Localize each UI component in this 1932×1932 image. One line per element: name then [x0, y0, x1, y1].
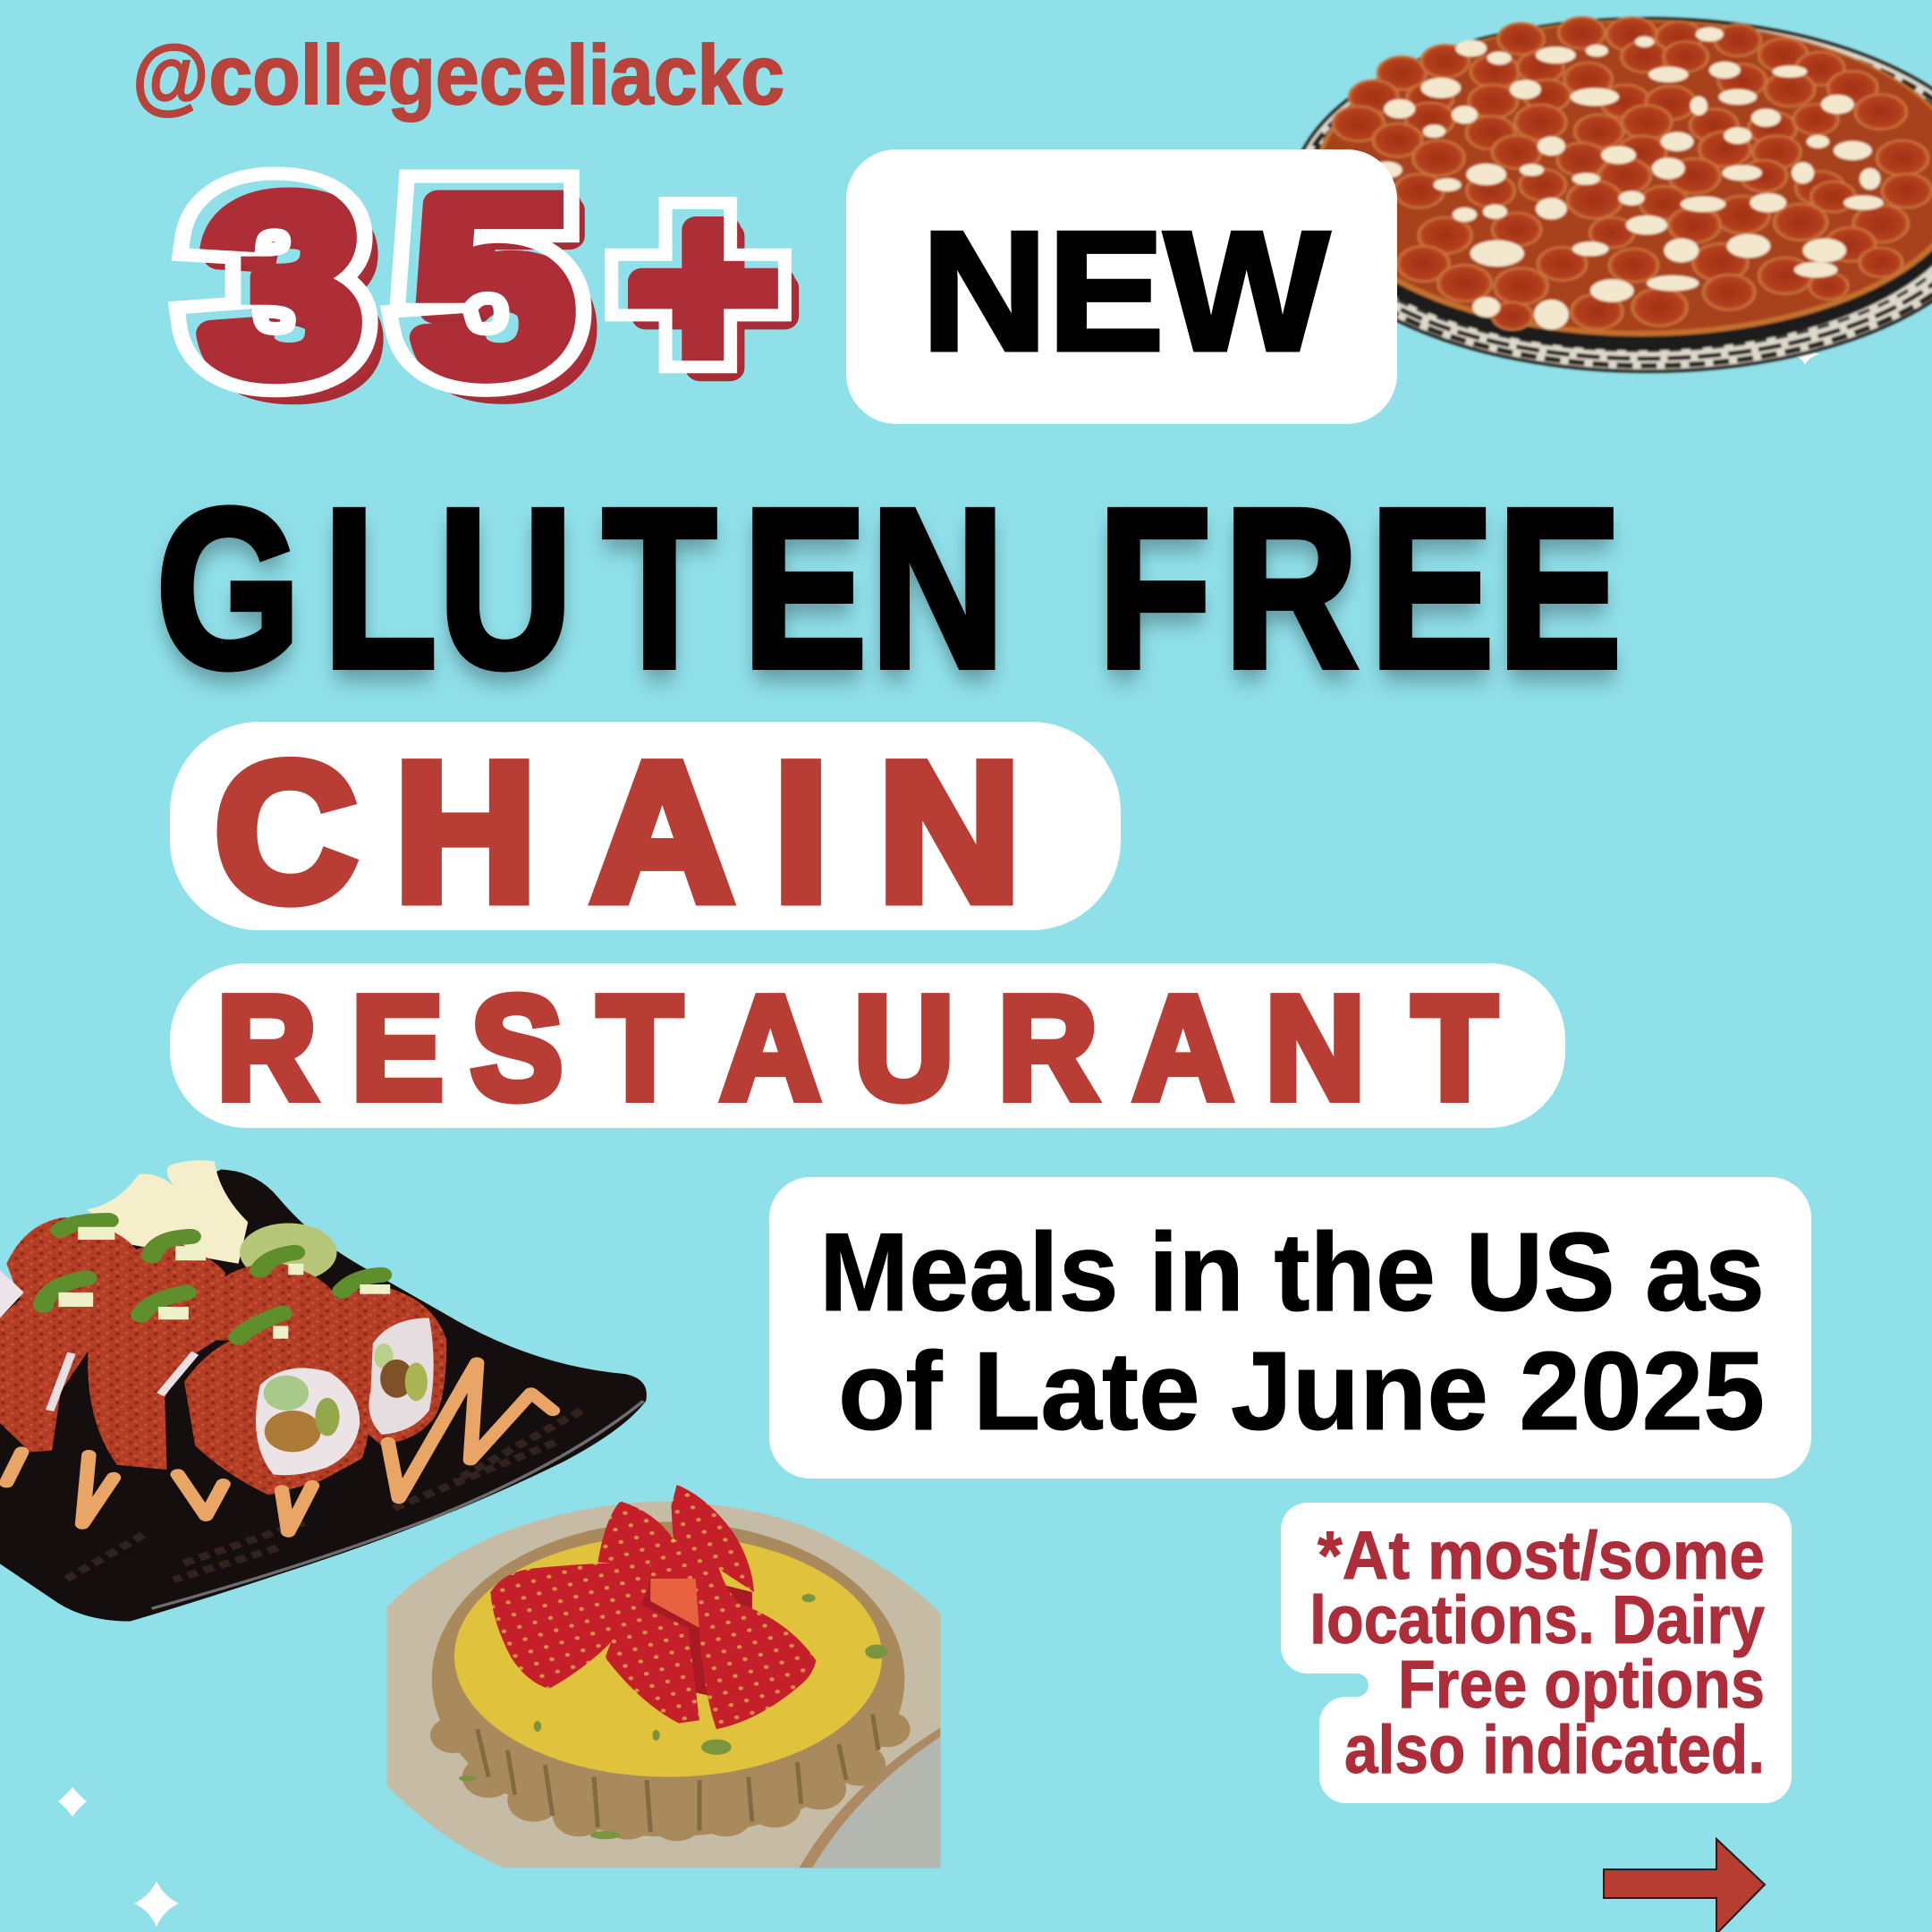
ginger [87, 1160, 248, 1264]
photo: lime tart with strawberries [387, 1485, 940, 1868]
number shadow layer: 5 [419, 155, 589, 444]
callout: meals in the US [769, 1177, 1811, 1479]
number fill layer [205, 148, 792, 437]
icon: sparkle bottom left small [58, 1787, 87, 1817]
number shadow layer: + [634, 154, 796, 444]
callout: disclaimer [1281, 1503, 1792, 1803]
handle: @collegeceliackc: @collegeceliackc [132, 28, 784, 122]
pill: CHAIN: CHAIN [215, 722, 1021, 942]
heading number: 35+ [168, 166, 800, 404]
plate [0, 1169, 647, 1622]
photo: sushi rolls on black plate [0, 1160, 647, 1622]
strawberries [609, 1556, 752, 1706]
callout: meals in the US: Meals in the US as [819, 1211, 1765, 1335]
spicy mayo [6, 1362, 553, 1532]
arrow: next [1604, 1839, 1765, 1932]
callout: disclaimer: locations. Dairy [1309, 1582, 1765, 1658]
crust scallops [478, 1715, 878, 1832]
plate rim highlight [152, 1401, 643, 1608]
callout: disclaimer: *At most/some [1318, 1518, 1765, 1594]
number fill layer: + [631, 148, 792, 437]
icon: sparkle bottom left large [134, 1881, 179, 1927]
heading: GLUTEN FREE: GLUTEN FREE [157, 476, 1622, 728]
callout: meals in the US: of Late June 2025 [838, 1330, 1765, 1453]
roll cut faces [369, 1318, 434, 1435]
photo: pepperoni pizza [1292, 17, 1932, 371]
pill: RESTAURANT: RESTAURANT [217, 966, 1496, 1130]
roll fillings [264, 1376, 309, 1411]
lime zest [459, 1594, 887, 1839]
badge: NEW [846, 149, 1397, 424]
rolls [0, 1217, 446, 1496]
jalapeno toppings [43, 1221, 382, 1337]
number fill layer: 5 [416, 148, 586, 437]
tart plate [387, 1501, 940, 1868]
badge: NEW: NEW [921, 197, 1330, 386]
heading: GLUTEN FREE: GLUTEN FREE [157, 463, 1622, 716]
crust [430, 1521, 911, 1841]
side plate [800, 1728, 940, 1868]
icon: sparkle behind pizza [1791, 340, 1819, 365]
number shadow layer [208, 154, 796, 444]
callout: disclaimer: Free options [1398, 1647, 1765, 1723]
number fill layer: 3 [205, 148, 375, 437]
wasabi [240, 1223, 337, 1282]
plate ridges [65, 1411, 580, 1580]
callout: disclaimer: also indicated. [1344, 1712, 1765, 1788]
number shadow layer: 3 [208, 155, 378, 444]
number white outline [168, 166, 792, 397]
filling [454, 1536, 882, 1777]
